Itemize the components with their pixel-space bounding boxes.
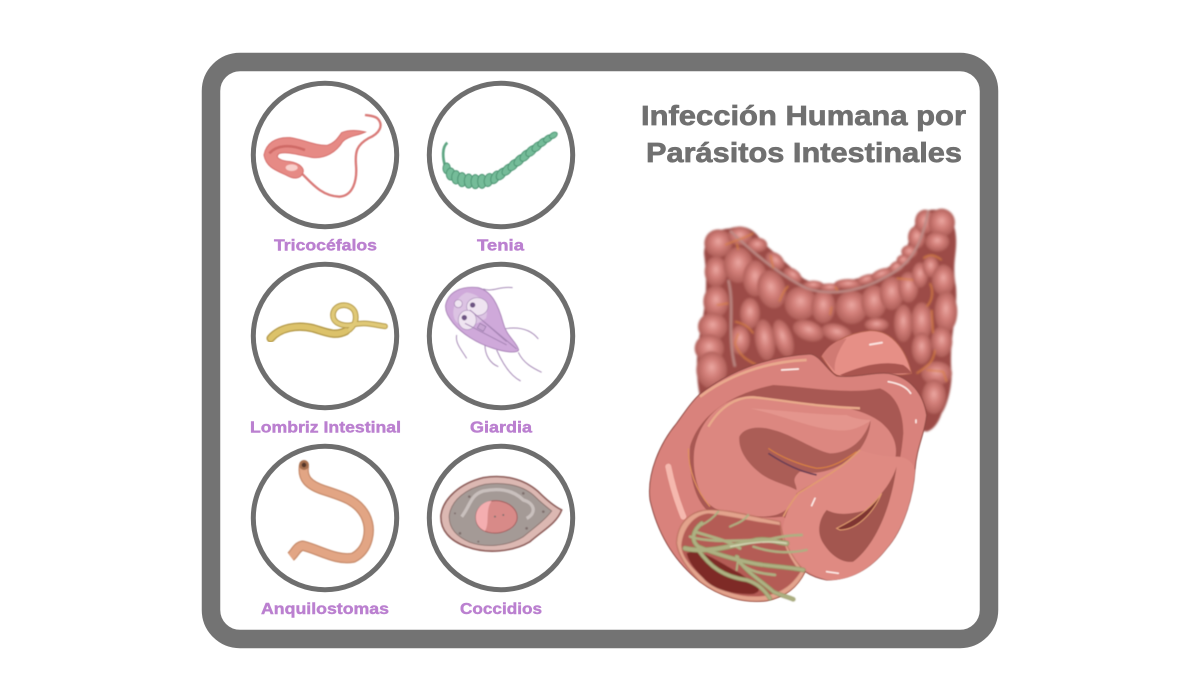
icon: coccidio oocyst <box>441 477 562 551</box>
parasite card: Tricocéfalos <box>253 83 397 254</box>
label: Giardia: Giardia <box>470 420 532 436</box>
parasite card: Lombriz Intestinal <box>250 264 401 436</box>
label: Lombriz Intestinal: Lombriz Intestinal <box>250 420 401 436</box>
parasite card: Giardia <box>429 264 573 436</box>
label: Coccidios: Coccidios <box>460 601 542 618</box>
parasite card: Tenia <box>429 83 573 254</box>
label: Tricocéfalos: Tricocéfalos <box>274 238 377 254</box>
title: Infección Humana por <box>641 100 966 131</box>
colon <box>695 209 957 432</box>
title: Parásitos Intestinales <box>646 137 962 168</box>
opening with worms <box>677 510 807 601</box>
label: Anquilostomas: Anquilostomas <box>261 601 389 618</box>
icon: anquilostoma worm <box>291 460 369 558</box>
title <box>641 100 966 168</box>
icon: lombriz worm <box>271 305 385 338</box>
parasite card: Anquilostomas <box>253 446 397 618</box>
parasite card: Coccidios <box>429 446 573 618</box>
large intestine section <box>649 354 927 601</box>
icon: tricocéfalos worm <box>264 115 381 197</box>
illustration: intestine with parasites <box>649 209 957 601</box>
icon: tenia worm <box>443 131 558 189</box>
panel frame <box>211 62 989 639</box>
stomach-like fold <box>822 331 912 379</box>
icon: giardia protozoan <box>446 287 542 381</box>
label: Tenia: Tenia <box>477 238 524 254</box>
